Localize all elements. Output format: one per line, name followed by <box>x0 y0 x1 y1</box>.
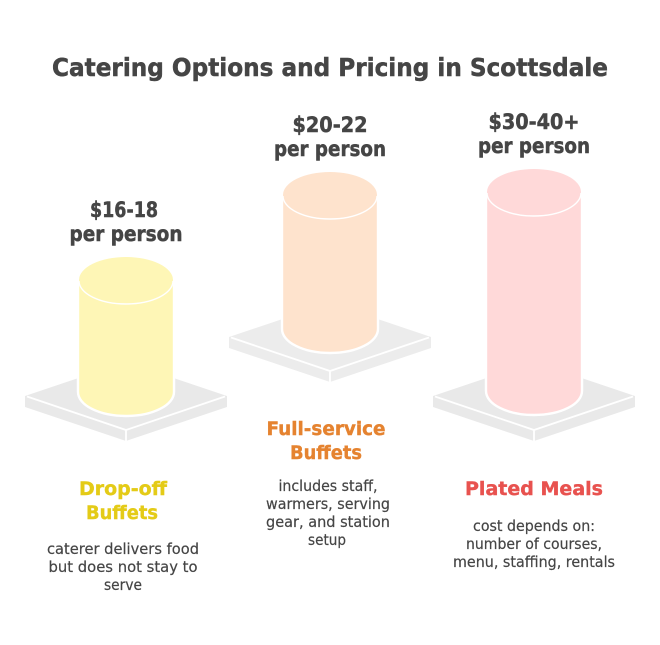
description: serve <box>104 576 142 594</box>
price label: $20-22 per person: $20-22 <box>292 113 368 137</box>
description <box>47 540 199 594</box>
description: cost depends on: <box>473 517 595 535</box>
heading <box>266 418 386 464</box>
price label: $20-22 per person: per person <box>274 137 386 161</box>
heading: Plated Meals <box>465 478 603 500</box>
description: but does not stay to <box>48 558 198 576</box>
heading: Buffets <box>86 502 158 524</box>
description: gear, and station <box>266 513 390 531</box>
description: includes staff, <box>278 477 378 495</box>
price label: $30-40+ per person: per person <box>478 134 590 158</box>
cylinder <box>486 169 582 415</box>
platform <box>25 362 227 441</box>
description: number of courses, <box>466 535 602 553</box>
platform <box>433 362 635 441</box>
column: plated meals <box>433 110 635 571</box>
description <box>266 477 390 549</box>
price label: $30-40+ per person <box>478 110 590 158</box>
heading: Drop-off <box>79 478 168 500</box>
description: setup <box>308 531 346 549</box>
description: menu, staffing, rentals <box>453 553 615 571</box>
heading <box>79 478 168 524</box>
heading: Full-service <box>266 418 386 440</box>
column: drop-off buffets <box>25 198 227 594</box>
price label: $30-40+ per person: $30-40+ <box>488 110 580 134</box>
cylinder <box>282 172 378 353</box>
heading: Buffets <box>290 442 362 464</box>
description: caterer delivers food <box>47 540 199 558</box>
platform <box>229 303 431 382</box>
price label: $16-18 per person <box>70 198 182 246</box>
title: Catering Options and Pricing in Scottsdale <box>52 53 608 82</box>
description <box>453 517 615 571</box>
cylinder <box>78 257 174 416</box>
price label: $16-18 per person: per person <box>70 222 182 246</box>
price label: $20-22 per person <box>274 113 386 161</box>
column: full-service buffets <box>229 113 431 549</box>
description: warmers, serving <box>266 495 390 513</box>
price label: $16-18 per person: $16-18 <box>90 198 158 222</box>
